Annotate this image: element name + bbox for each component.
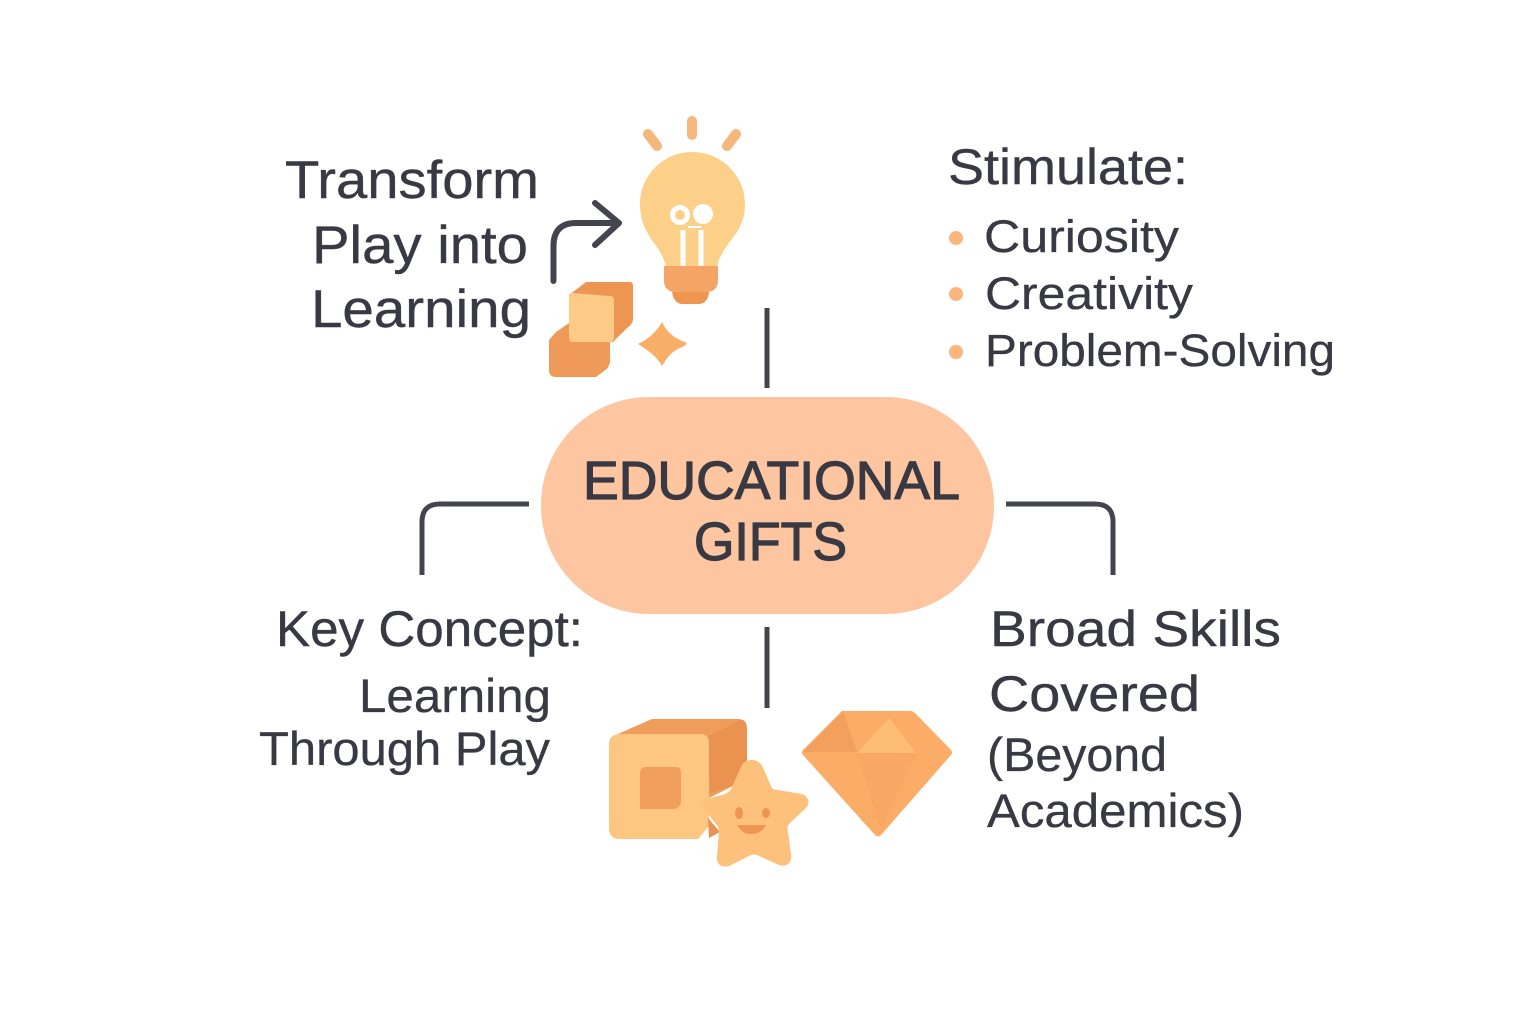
text: transform play into learning: Transform [285, 151, 539, 210]
central pill: educational gifts: GIFTS [694, 512, 847, 572]
bullet: problem-solving: Problem-Solving [985, 325, 1335, 376]
central pill: educational gifts: EDUCATIONAL [583, 451, 960, 511]
text: broad skills: Broad Skills [990, 601, 1281, 657]
text: stimulate list: Stimulate: [948, 139, 1188, 195]
text: transform play into learning [285, 151, 539, 339]
rays [648, 121, 736, 146]
text: broad skills: Academics) [987, 784, 1244, 837]
text: stimulate list [948, 139, 1335, 376]
text: key concept [259, 601, 583, 775]
text: broad skills: Covered [989, 666, 1200, 722]
text: key concept: Key Concept: [276, 601, 583, 657]
bulb glass [640, 152, 745, 267]
text: transform play into learning: Play into [312, 216, 528, 275]
icon: toy block [609, 719, 747, 839]
text: broad skills [987, 601, 1281, 837]
connector: bottom [764, 627, 770, 708]
text: transform play into learning: Learning [311, 280, 531, 339]
icon: smiling star [698, 760, 808, 867]
bulb base [664, 266, 718, 292]
bullet: creativity: Creativity [985, 268, 1194, 319]
connector: top [764, 308, 770, 388]
bullet: curiosity: Curiosity [984, 211, 1180, 262]
icon: curved arrow [554, 203, 619, 281]
central pill: educational gifts [541, 397, 994, 614]
text: key concept: Learning [359, 669, 551, 722]
filament [683, 230, 701, 266]
text: key concept: Through Play [259, 722, 551, 775]
icon: toy cubes [549, 282, 633, 377]
connector: right [1006, 504, 1113, 575]
icon: light bulb [640, 121, 745, 304]
text: broad skills: (Beyond [987, 728, 1167, 781]
connector: left [422, 504, 529, 575]
icon: sparkle [639, 323, 686, 365]
icon: diamond [802, 711, 952, 836]
